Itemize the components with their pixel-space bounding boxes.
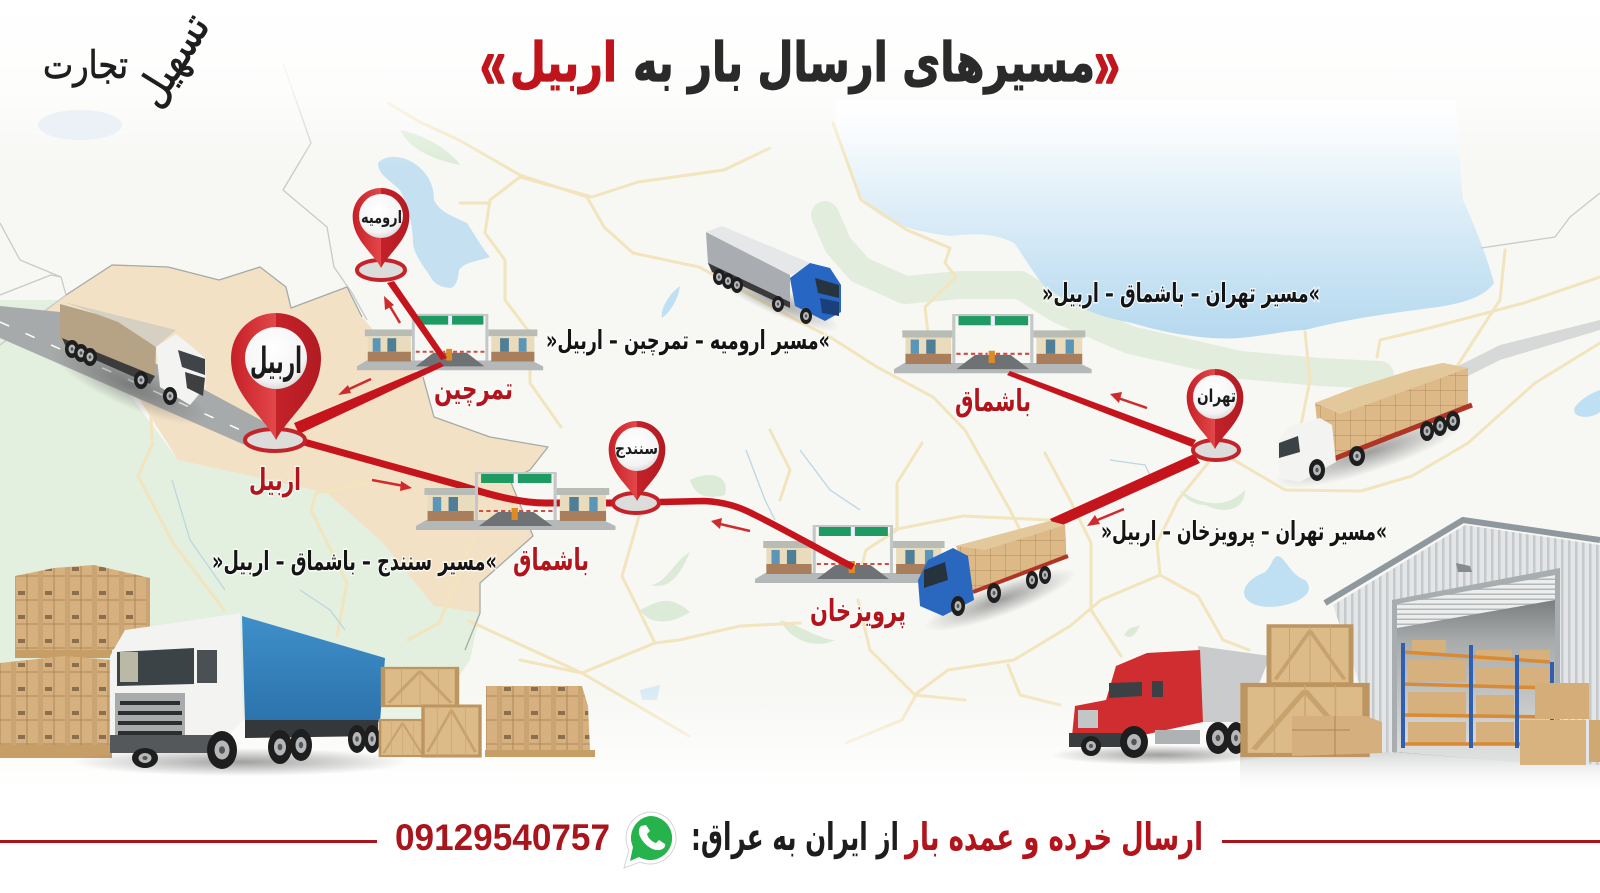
truck: silver trailer blue cab xyxy=(705,226,845,341)
arrow: toward bashmaq north xyxy=(1110,392,1147,408)
truck: red cab silver trailer xyxy=(1050,646,1270,765)
map: roads xyxy=(138,103,1600,743)
map: fade bottom xyxy=(0,690,1600,790)
pin: tehran xyxy=(1187,369,1243,460)
gate: tamarchin xyxy=(357,314,543,370)
crates and cartons beside blue truck xyxy=(380,668,595,757)
map: lake urmia xyxy=(378,157,490,288)
pin: urmia xyxy=(353,188,409,280)
route label: urmia: »مسیر ارومیه – تمرچین – اربیل« xyxy=(546,326,830,356)
route: tehran to bashmaq xyxy=(1007,371,1196,447)
arrow: toward bashmaq south xyxy=(372,480,412,491)
map: tan region xyxy=(40,265,548,613)
pin: sanandaj xyxy=(609,421,665,513)
footer rules xyxy=(0,840,1600,843)
title chevron left: « xyxy=(480,24,506,104)
gate: parvizkhan xyxy=(755,525,951,583)
footer: red text: ارسال خرده و عمده بار xyxy=(904,815,1203,860)
city label: parvizkhan: پرویزخان xyxy=(810,594,906,629)
title chevron right: » xyxy=(1094,24,1120,104)
route label: tehran bashmaq: »مسیر تهران – باشماق – اربیل« xyxy=(1042,279,1320,309)
pin base ring xyxy=(245,429,305,451)
distant grey road xyxy=(1330,320,1600,440)
city label: south bashmaq: باشماق xyxy=(513,543,589,578)
logo word 1: تجارت xyxy=(43,43,128,87)
pin label: سنندج xyxy=(615,439,658,458)
map: green lowland xyxy=(0,300,480,720)
direction arrows xyxy=(338,296,1147,531)
map: small lakes xyxy=(640,286,1600,700)
truck: beige trailer top left xyxy=(43,302,217,440)
route: tehran to parvizkhan xyxy=(1050,454,1200,528)
arrow: toward parvizkhan xyxy=(1087,509,1124,526)
gate: south bashmaq xyxy=(416,472,616,530)
map: caspian green band xyxy=(825,215,1380,375)
gate: north bashmaq xyxy=(894,314,1092,373)
pin: erbil xyxy=(231,313,321,451)
title dark text: مسیرهای ارسال بار به xyxy=(633,31,1095,94)
arrow: toward urmia xyxy=(384,296,400,323)
route: parvizkhan to sanandaj xyxy=(660,501,853,567)
highway to truck xyxy=(0,306,270,445)
arrow: toward erbil xyxy=(338,379,371,395)
route label: tehran parvizkhan: »مسیر تهران – پرویزخان – اربیل« xyxy=(1101,517,1387,547)
logo xyxy=(43,5,220,116)
icon: whatsapp xyxy=(624,812,676,868)
route: tamarchin to erbil xyxy=(294,362,444,434)
truck: blue cab flatbed with cartons xyxy=(918,521,1081,642)
crates and cartons beside warehouse xyxy=(1244,626,1600,765)
truck: white cab flatbed with cartons xyxy=(1269,363,1472,502)
title red word: اربیل xyxy=(510,31,617,94)
truck: big white cab blue trailer xyxy=(70,613,410,776)
map: caspian sea xyxy=(836,100,1494,338)
pin label: اربیل xyxy=(250,341,302,382)
pin label: تهران xyxy=(1197,386,1236,407)
pin label: ارومیه xyxy=(361,208,402,228)
city label: tamarchin: تمرچین xyxy=(434,372,513,407)
city label: north bashmaq: باشماق xyxy=(955,384,1031,419)
warehouse xyxy=(1240,520,1600,793)
cartons: left stacks xyxy=(0,565,150,758)
route: urmia to tamarchin xyxy=(387,281,447,360)
footer: dark text: از ایران به عراق: xyxy=(691,815,899,859)
map: fade top xyxy=(0,0,1600,165)
city label: erbil: اربیل xyxy=(249,463,301,498)
warehouse shelves xyxy=(1403,640,1552,748)
arrow: toward sanandaj xyxy=(711,518,750,531)
route: sanandaj to erbil through bashmaq xyxy=(304,442,612,503)
map: borders and rivers xyxy=(0,63,1600,650)
map: green patches xyxy=(400,130,1245,644)
route label: sanandaj: »مسیر سنندج – باشماق – اربیل« xyxy=(212,547,497,577)
title xyxy=(480,24,1120,104)
footer: phone number: 09129540757 xyxy=(395,817,610,858)
